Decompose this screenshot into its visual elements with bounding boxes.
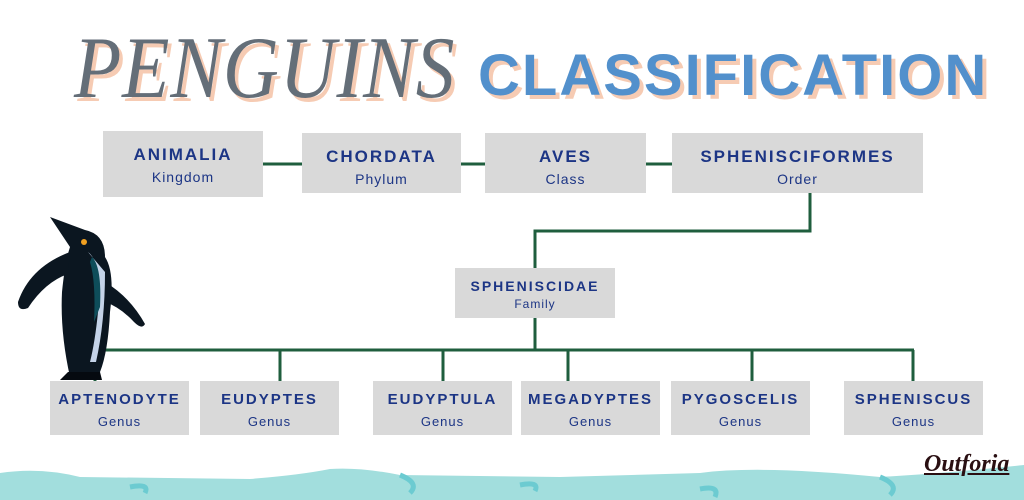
genus: Spheniscus: Genus <box>892 414 935 429</box>
genus: Eudyptes: EUDYPTES <box>221 391 318 408</box>
box: Aves: AVES <box>539 147 592 166</box>
genus boxes <box>50 381 983 435</box>
box: Animalia <box>103 131 263 197</box>
logo: Outforia: Outforia <box>924 451 1009 477</box>
box: Chordata <box>302 133 461 193</box>
genus: Eudyptes: Genus <box>248 414 291 429</box>
box: Animalia: Kingdom <box>152 169 214 185</box>
genus: Pygoscelis <box>671 381 810 435</box>
genus: Megadyptes <box>521 381 660 435</box>
genus: Eudyptula: Genus <box>421 414 464 429</box>
genus: Eudyptes <box>200 381 339 435</box>
title: PENGUINS <box>74 20 455 117</box>
genus: Aptenodyte <box>50 381 189 435</box>
genus: Eudyptula: EUDYPTULA <box>388 391 497 408</box>
genus: Spheniscus: SPHENISCUS <box>855 391 972 408</box>
genus: Aptenodyte: APTENODYTE <box>58 391 181 408</box>
box: Sphenisciformes <box>672 133 923 193</box>
genus: Spheniscus <box>844 381 983 435</box>
box: Sphenisciformes: SPHENISCIFORMES <box>700 147 895 166</box>
box: Aves <box>485 133 646 193</box>
box: Sphenisciformes: Order <box>777 171 818 187</box>
water waves <box>0 465 1024 500</box>
box: Spheniscidae <box>455 268 615 318</box>
genus: Aptenodyte: Genus <box>98 414 141 429</box>
title: CLASSIFICATION <box>478 43 988 108</box>
box: Aves: Class <box>545 171 586 187</box>
box: Chordata: CHORDATA <box>326 147 437 166</box>
box: Spheniscidae: SPHENISCIDAE <box>470 278 600 294</box>
icon: penguin <box>18 217 145 380</box>
genus: Megadyptes: MEGADYPTES <box>528 391 653 408</box>
genus: Eudyptula <box>373 381 512 435</box>
box: Spheniscidae: Family <box>514 297 556 311</box>
box: Animalia: ANIMALIA <box>133 145 233 164</box>
genus: Megadyptes: Genus <box>569 414 612 429</box>
genus: Pygoscelis: Genus <box>719 414 762 429</box>
genus: Pygoscelis: PYGOSCELIS <box>682 391 799 408</box>
box: Chordata: Phylum <box>355 171 408 187</box>
title <box>74 20 988 117</box>
